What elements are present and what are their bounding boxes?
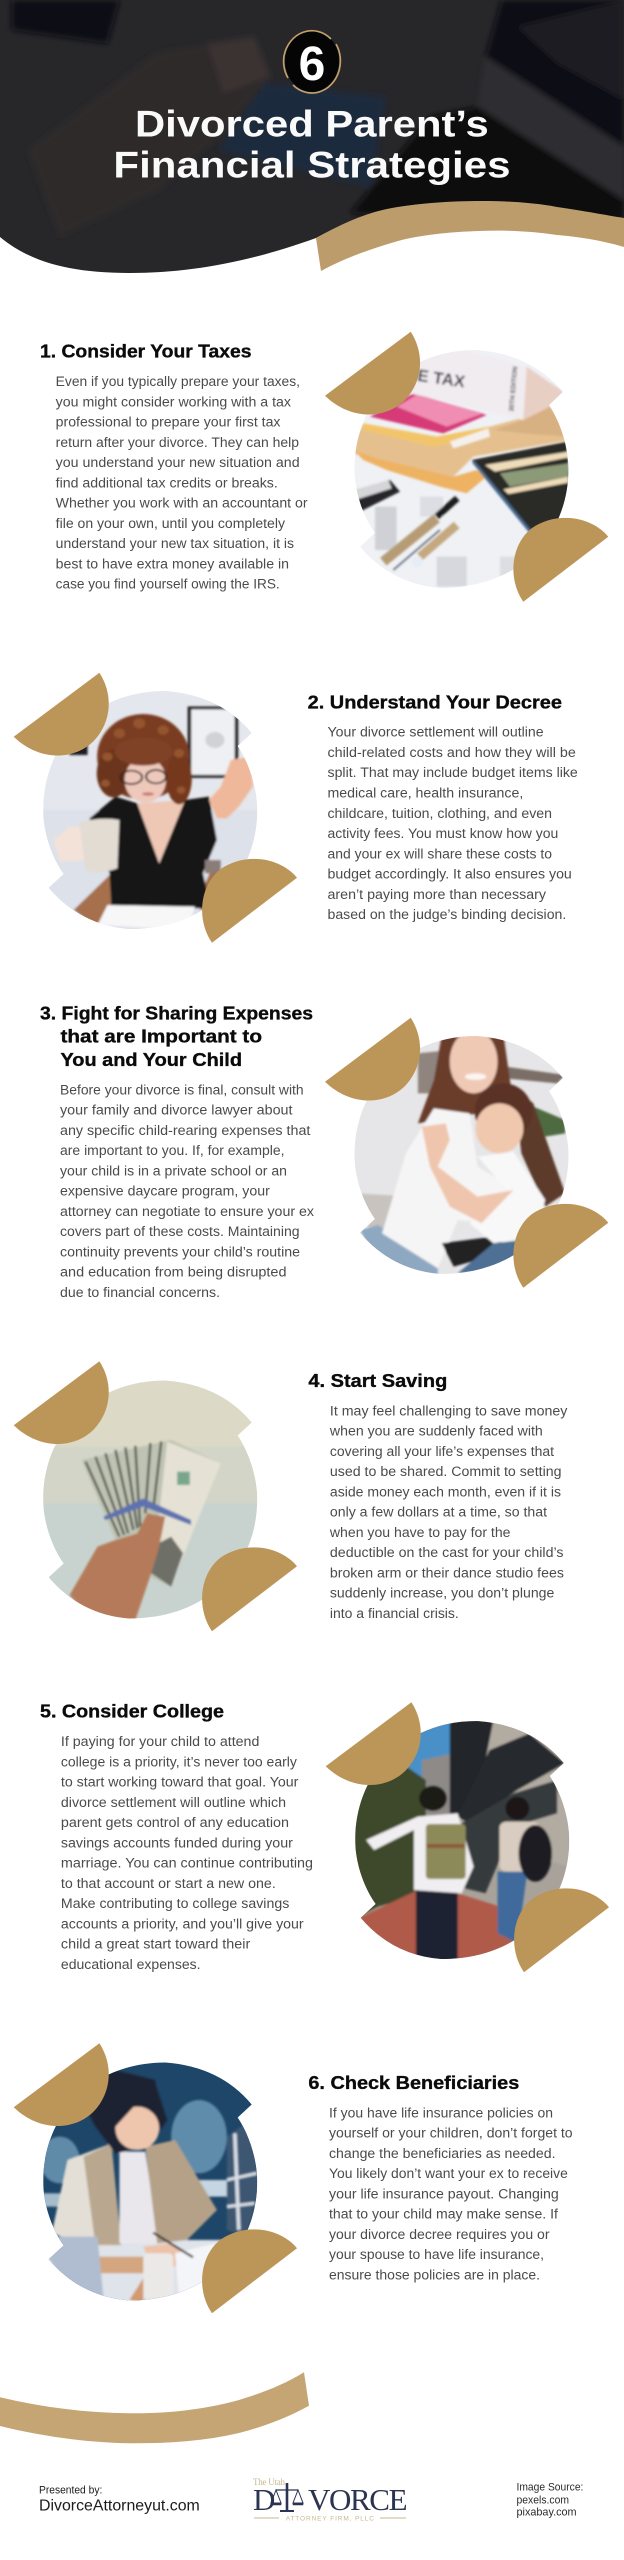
photo: couple walking with backpacks xyxy=(350,1715,572,1965)
tan accents 6 xyxy=(14,2043,297,2313)
body text 5: college is a priority, it’s never too early xyxy=(61,1754,297,1769)
body text 1: Whether you work with an accountant or xyxy=(56,496,308,511)
hero tan ribbon xyxy=(316,201,624,271)
body text 2: Your divorce settlement will outline xyxy=(328,725,544,740)
icon: scales of justice xyxy=(271,2483,303,2511)
panel 6: check beneficiaries xyxy=(14,2043,573,2313)
body text 6: your divorce decree requires you or xyxy=(329,2227,550,2242)
photo: woman with coffee mug xyxy=(40,685,263,935)
panel 4: start saving xyxy=(14,1361,568,1631)
heading 1: 1. Consider Your Taxes xyxy=(40,340,251,361)
footer: image source: Image Source: xyxy=(516,2482,583,2494)
footer: firm logo: VORCE xyxy=(308,2482,408,2517)
body text 1: Even if you typically prepare your taxes, xyxy=(56,374,300,389)
body text 3: continuity prevents your child’s routine xyxy=(60,1244,300,1260)
body text 5: educational expenses. xyxy=(61,1957,201,1972)
heading 2: 2. Understand Your Decree xyxy=(308,691,562,712)
hero header background photo xyxy=(0,0,624,280)
body text 4: aside money each month, even if it is xyxy=(330,1484,561,1499)
body text 3: your family and divorce lawyer about xyxy=(60,1103,293,1118)
body text 6: ensure those policies are in place. xyxy=(329,2268,540,2282)
body text 2: budget accordingly. It also ensures you xyxy=(328,867,572,882)
body text 6: your spouse to have life insurance, xyxy=(329,2247,544,2262)
heading 3: that are Important to xyxy=(60,1026,262,1047)
body text 1: you might consider working with a tax xyxy=(56,394,291,409)
body text 3: covers part of these costs. Maintaining xyxy=(60,1224,300,1239)
title: Financial Strategies xyxy=(113,144,511,185)
body text 2: based on the judge’s binding decision. xyxy=(328,907,566,922)
body text 5: divorce settlement will outline which xyxy=(61,1795,286,1810)
footer: firm logo: The Utah xyxy=(253,2477,286,2487)
heading 5: 5. Consider College xyxy=(40,1700,224,1721)
tan accents 2 xyxy=(14,673,297,943)
body text 3: any specific child-rearing expenses that xyxy=(60,1123,311,1138)
body text 5: Make contributing to college savings xyxy=(61,1896,290,1911)
body text 4: when you are suddenly faced with xyxy=(329,1424,543,1439)
body text 1 xyxy=(56,374,308,592)
photo: tax papers and calculator xyxy=(352,344,573,594)
footer: image source xyxy=(516,2482,583,2519)
tan accents 3 xyxy=(325,1018,608,1288)
tan accents 5 xyxy=(326,1702,609,1972)
title xyxy=(113,104,511,185)
panel 2: understand your decree xyxy=(14,673,578,943)
body text 1: best to have extra money available in xyxy=(56,556,289,571)
body text 2: child-related costs and how they will be xyxy=(328,745,576,760)
body text 5: parent gets control of any education xyxy=(61,1815,289,1830)
body text 5: child a great start toward their xyxy=(61,1937,251,1952)
body text 6 xyxy=(329,2105,573,2282)
body text 4: broken arm or their dance studio fees xyxy=(330,1566,564,1580)
body text 4: suddenly increase, you don’t plunge xyxy=(330,1586,554,1601)
body text 6: that to your child may make sense. If xyxy=(329,2207,558,2222)
heading 6: 6. Check Beneficiaries xyxy=(308,2072,519,2093)
heading 4: 4. Start Saving xyxy=(308,1370,447,1391)
footer: presented by xyxy=(39,2485,200,2515)
tan accents 1 xyxy=(325,332,608,602)
photo: woman signing documents xyxy=(43,2062,258,2300)
body text 5 xyxy=(61,1734,313,1972)
badge: number 6: 6 xyxy=(299,38,325,91)
body text 1: file on your own, until you completely xyxy=(56,516,285,531)
badge: number 6 xyxy=(284,30,340,93)
body text 1: return after your divorce. They can help xyxy=(56,435,299,450)
photo: tax papers and calculator: 30TH EDITION xyxy=(508,366,519,412)
body text 3: due to financial concerns. xyxy=(60,1285,220,1300)
body text 1: you understand your new situation and xyxy=(56,455,300,470)
body text 6: You likely don’t want your ex to receive xyxy=(329,2166,568,2181)
footer: image source: pixabay.com xyxy=(516,2507,577,2519)
body text 3: attorney can negotiate to ensure your ex xyxy=(60,1204,314,1219)
footer: image source: pexels.com xyxy=(516,2494,569,2506)
body text 4 xyxy=(329,1403,568,1621)
body text 4: into a financial crisis. xyxy=(330,1606,459,1621)
bottom tan ribbon xyxy=(0,2372,309,2443)
title: Divorced Parent’s xyxy=(135,104,489,145)
heading 3: You and Your Child xyxy=(60,1049,242,1070)
body text 5: savings accounts funded during your xyxy=(61,1835,293,1850)
body text 4: used to be shared. Commit to setting xyxy=(330,1464,562,1479)
photo: mother hugging child xyxy=(352,1030,572,1280)
body text 3: Before your divorce is final, consult with xyxy=(60,1082,304,1097)
body text 2: split. That may include budget items like xyxy=(328,765,578,780)
panel 3: fight for sharing expenses xyxy=(40,1002,608,1300)
body text 6: change the beneficiaries as needed. xyxy=(329,2146,556,2161)
heading 3: 3. Fight for Sharing Expenses xyxy=(40,1002,313,1023)
body text 5: to that account or start a new one. xyxy=(61,1876,276,1891)
heading 3 xyxy=(40,1002,313,1070)
body text 5: marriage. You can continue contributing xyxy=(61,1856,313,1871)
body text 3: expensive daycare program, your xyxy=(60,1184,270,1199)
body text 6: your life insurance payout. Changing xyxy=(329,2186,559,2201)
body text 3: are important to you. If, for example, xyxy=(60,1143,284,1158)
body text 1: understand your new tax situation, it is xyxy=(56,536,294,551)
footer: presented by: DivorceAttorneyut.com xyxy=(39,2498,200,2515)
panel 5: consider college xyxy=(40,1700,609,1972)
body text 4: only a few dollars at a time, so that xyxy=(330,1505,547,1520)
footer: firm logo: D xyxy=(253,2482,275,2517)
body text 2: activity fees. You must know how you xyxy=(328,826,558,841)
body text 2: childcare, tuition, clothing, and even xyxy=(328,806,552,821)
body text 4: covering all your life’s expenses that xyxy=(330,1444,554,1459)
body text 2: medical care, health insurance, xyxy=(328,786,523,800)
body text 2: aren’t paying more than necessary xyxy=(328,887,546,902)
footer: presented by: Presented by: xyxy=(39,2485,102,2497)
body text 4: It may feel challenging to save money xyxy=(330,1403,568,1418)
body text 4: when you have to pay for the xyxy=(329,1525,510,1540)
body text 3 xyxy=(60,1082,314,1300)
body text 5: to start working toward that goal. Your xyxy=(61,1774,299,1790)
photo: hand holding cash xyxy=(40,1374,263,1624)
body text 3: and education from being disrupted xyxy=(60,1265,286,1280)
body text 1: professional to prepare your first tax xyxy=(56,414,281,430)
body text 1: find additional tax credits or breaks. xyxy=(56,475,278,490)
body text 1: case you find yourself owing the IRS. xyxy=(56,577,280,592)
body text 3: your child is in a private school or an xyxy=(60,1163,287,1178)
body text 6: yourself or your children, don’t forget to xyxy=(329,2126,573,2141)
footer: firm logo xyxy=(253,2477,408,2522)
panel 1: consider your taxes xyxy=(40,332,608,602)
body text 5: If paying for your child to attend xyxy=(61,1734,259,1749)
body text 2 xyxy=(328,725,578,922)
body text 5: accounts a priority, and you’ll give your xyxy=(61,1916,304,1931)
body text 4: deductible on the cast for your child’s xyxy=(330,1545,564,1560)
body text 2: and your ex will share these costs to xyxy=(328,846,552,861)
tan accents 4 xyxy=(14,1361,297,1631)
footer: firm logo: ATTORNEY FIRM, PLLC xyxy=(286,2515,374,2522)
body text 6: If you have life insurance policies on xyxy=(329,2105,553,2120)
photo: tax papers and calculator: E TAX xyxy=(416,366,466,391)
